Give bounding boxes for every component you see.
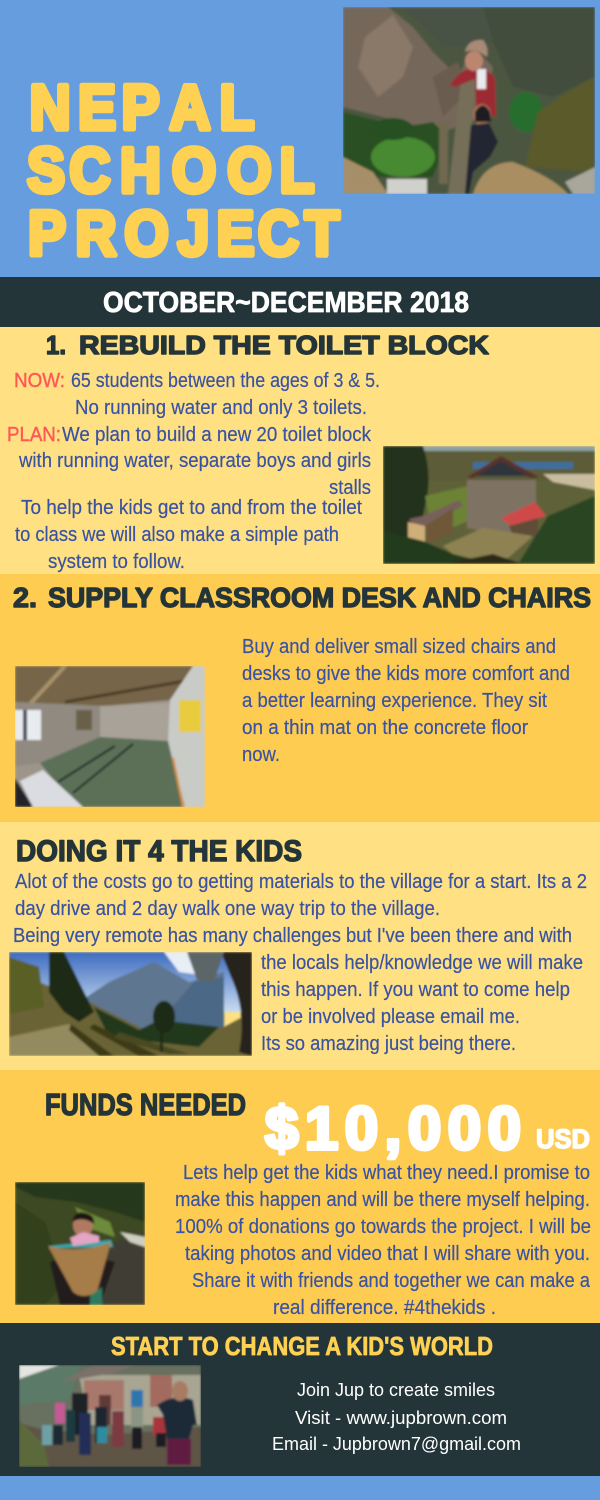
title: PROJECT bbox=[28, 198, 339, 269]
title bbox=[27, 72, 339, 269]
text: now and plan: 65 students between the ages of 3 & 5. bbox=[71, 370, 380, 392]
text: desks and chairs bbox=[242, 636, 570, 766]
text: costs and challenges: Its so amazing just being there. bbox=[261, 1033, 516, 1055]
heading: doing it 4 the kids: DOING IT 4 THE KIDS bbox=[16, 835, 302, 868]
photo: two children on a hillside bbox=[343, 7, 595, 194]
text: now and plan: system to follow. bbox=[48, 551, 185, 573]
text: desks and chairs: desks to give the kids more comfort and bbox=[242, 663, 570, 685]
text: contact details: Visit - www.jupbrown.com bbox=[295, 1408, 507, 1428]
banner: dates bbox=[0, 277, 600, 327]
panel: call to action bbox=[0, 1323, 600, 1476]
heading: section 1: REBUILD THE TOILET BLOCK bbox=[79, 330, 489, 360]
panel: rebuild the toilet block bbox=[0, 327, 600, 574]
photo: child in basket bbox=[15, 1182, 145, 1305]
heading: funds needed: FUNDS NEEDED bbox=[45, 1087, 246, 1122]
text: contact details: Join Jup to create smiles bbox=[297, 1380, 495, 1400]
heading: section 1: 1. bbox=[46, 330, 66, 360]
panel: classroom desks and chairs bbox=[0, 574, 600, 822]
text: funds promise bbox=[175, 1162, 591, 1319]
text: costs and challenges: day drive and 2 day walk one way trip to the village. bbox=[15, 898, 440, 920]
text: costs and challenges: the locals help/knowledge we will make bbox=[261, 952, 583, 974]
panel: funds needed bbox=[0, 1070, 600, 1323]
text: now and plan: PLAN: bbox=[7, 424, 61, 446]
text: desks and chairs: Buy and deliver small sized chairs and bbox=[242, 636, 556, 658]
amount: 10,000 USD: $10,000 bbox=[265, 1095, 521, 1162]
text: now and plan: To help the kids get to and from the toilet bbox=[21, 497, 362, 519]
photo: empty classroom bbox=[15, 666, 205, 807]
text: now and plan: We plan to build a new 20 toilet block bbox=[62, 424, 372, 446]
panel: doing it 4 the kids bbox=[0, 822, 600, 1070]
text: now and plan: to class we will also make a simple path bbox=[15, 524, 339, 546]
title: NEPAL bbox=[30, 72, 254, 143]
banner text: OCTOBER~DECEMBER 2018 bbox=[103, 287, 469, 319]
panel: header background bbox=[0, 0, 600, 277]
text: costs and challenges: this happen. If you want to come help bbox=[261, 979, 570, 1001]
text: desks and chairs: now. bbox=[242, 744, 280, 766]
text: desks and chairs: a better learning experience. They sit bbox=[242, 690, 547, 712]
heading: start to change: START TO CHANGE A KID'S WORLD bbox=[111, 1331, 493, 1361]
text: now and plan: NOW: bbox=[14, 370, 65, 392]
text: now and plan bbox=[7, 370, 380, 573]
heading: section 2: SUPPLY CLASSROOM DESK AND CHAIRS bbox=[48, 582, 591, 613]
photo: terraced valley bbox=[9, 952, 252, 1056]
title: SCHOOL bbox=[27, 135, 314, 206]
text: now and plan: stalls bbox=[329, 477, 371, 499]
text: contact details: Email - Jupbrown7@gmail.com bbox=[272, 1434, 521, 1454]
text: funds promise: real difference. #4thekids . bbox=[273, 1297, 496, 1319]
text: now and plan: with running water, separate boys and girls bbox=[18, 450, 371, 472]
text: contact details bbox=[272, 1380, 521, 1454]
amount: 10,000 USD: USD bbox=[536, 1124, 590, 1154]
text: costs and challenges bbox=[13, 871, 587, 1055]
footer band bbox=[0, 1476, 600, 1500]
heading: section 2: 2. bbox=[13, 582, 37, 613]
text: now and plan: No running water and only 3 toilets. bbox=[75, 397, 367, 419]
photo: toilet block bbox=[383, 446, 595, 564]
photo: group of children bbox=[19, 1365, 201, 1467]
text: desks and chairs: on a thin mat on the concrete floor bbox=[242, 717, 528, 739]
text: costs and challenges: or be involved please email me. bbox=[261, 1006, 520, 1028]
